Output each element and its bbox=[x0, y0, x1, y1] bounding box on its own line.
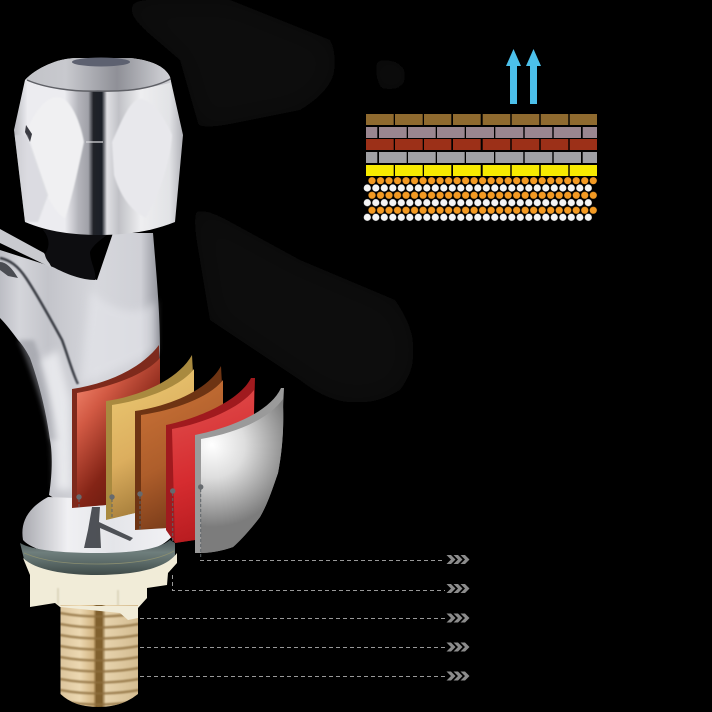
layer pin drops bbox=[79, 489, 201, 558]
faucet bbox=[0, 55, 185, 710]
leader 3 bbox=[140, 614, 470, 622]
granular dot rows bbox=[363, 176, 598, 221]
handle facets bbox=[66, 102, 84, 212]
handle top opening bbox=[72, 58, 130, 66]
spout and body bbox=[0, 229, 160, 502]
callout leader lines bbox=[140, 555, 470, 680]
handle bbox=[14, 55, 185, 235]
layer 3: copper bbox=[135, 366, 223, 530]
brass threaded stem bbox=[60, 600, 139, 710]
chrome base ring bbox=[22, 497, 173, 555]
dark cavity under handle bbox=[43, 230, 113, 280]
leader 4 bbox=[140, 642, 470, 652]
leader 1 bbox=[200, 555, 470, 564]
background smoke bbox=[110, 0, 414, 403]
exploded coating layers bbox=[72, 345, 284, 558]
brick row: gray bbox=[366, 152, 597, 163]
layer 4: red bbox=[166, 378, 255, 543]
brick row: yellow bbox=[366, 165, 597, 176]
leader 5 bbox=[140, 672, 470, 680]
layer 2: gold bbox=[106, 355, 194, 520]
collar overlap on stem bbox=[60, 606, 138, 620]
layer 1: salmon bbox=[72, 345, 160, 508]
plastic collar bbox=[23, 553, 177, 620]
layer pin markers bbox=[76, 484, 203, 500]
brick row: mauve bbox=[366, 127, 597, 138]
handle cap bbox=[26, 58, 172, 90]
lever arm bbox=[0, 229, 52, 268]
leader 2 bbox=[172, 575, 470, 593]
layered material diagram bbox=[363, 49, 598, 221]
brick row: red bbox=[366, 139, 597, 150]
gasket ring bbox=[20, 540, 175, 575]
layer 5: silver bbox=[195, 388, 284, 553]
upward arrows bbox=[506, 49, 541, 104]
brick row: brown bbox=[366, 114, 597, 125]
